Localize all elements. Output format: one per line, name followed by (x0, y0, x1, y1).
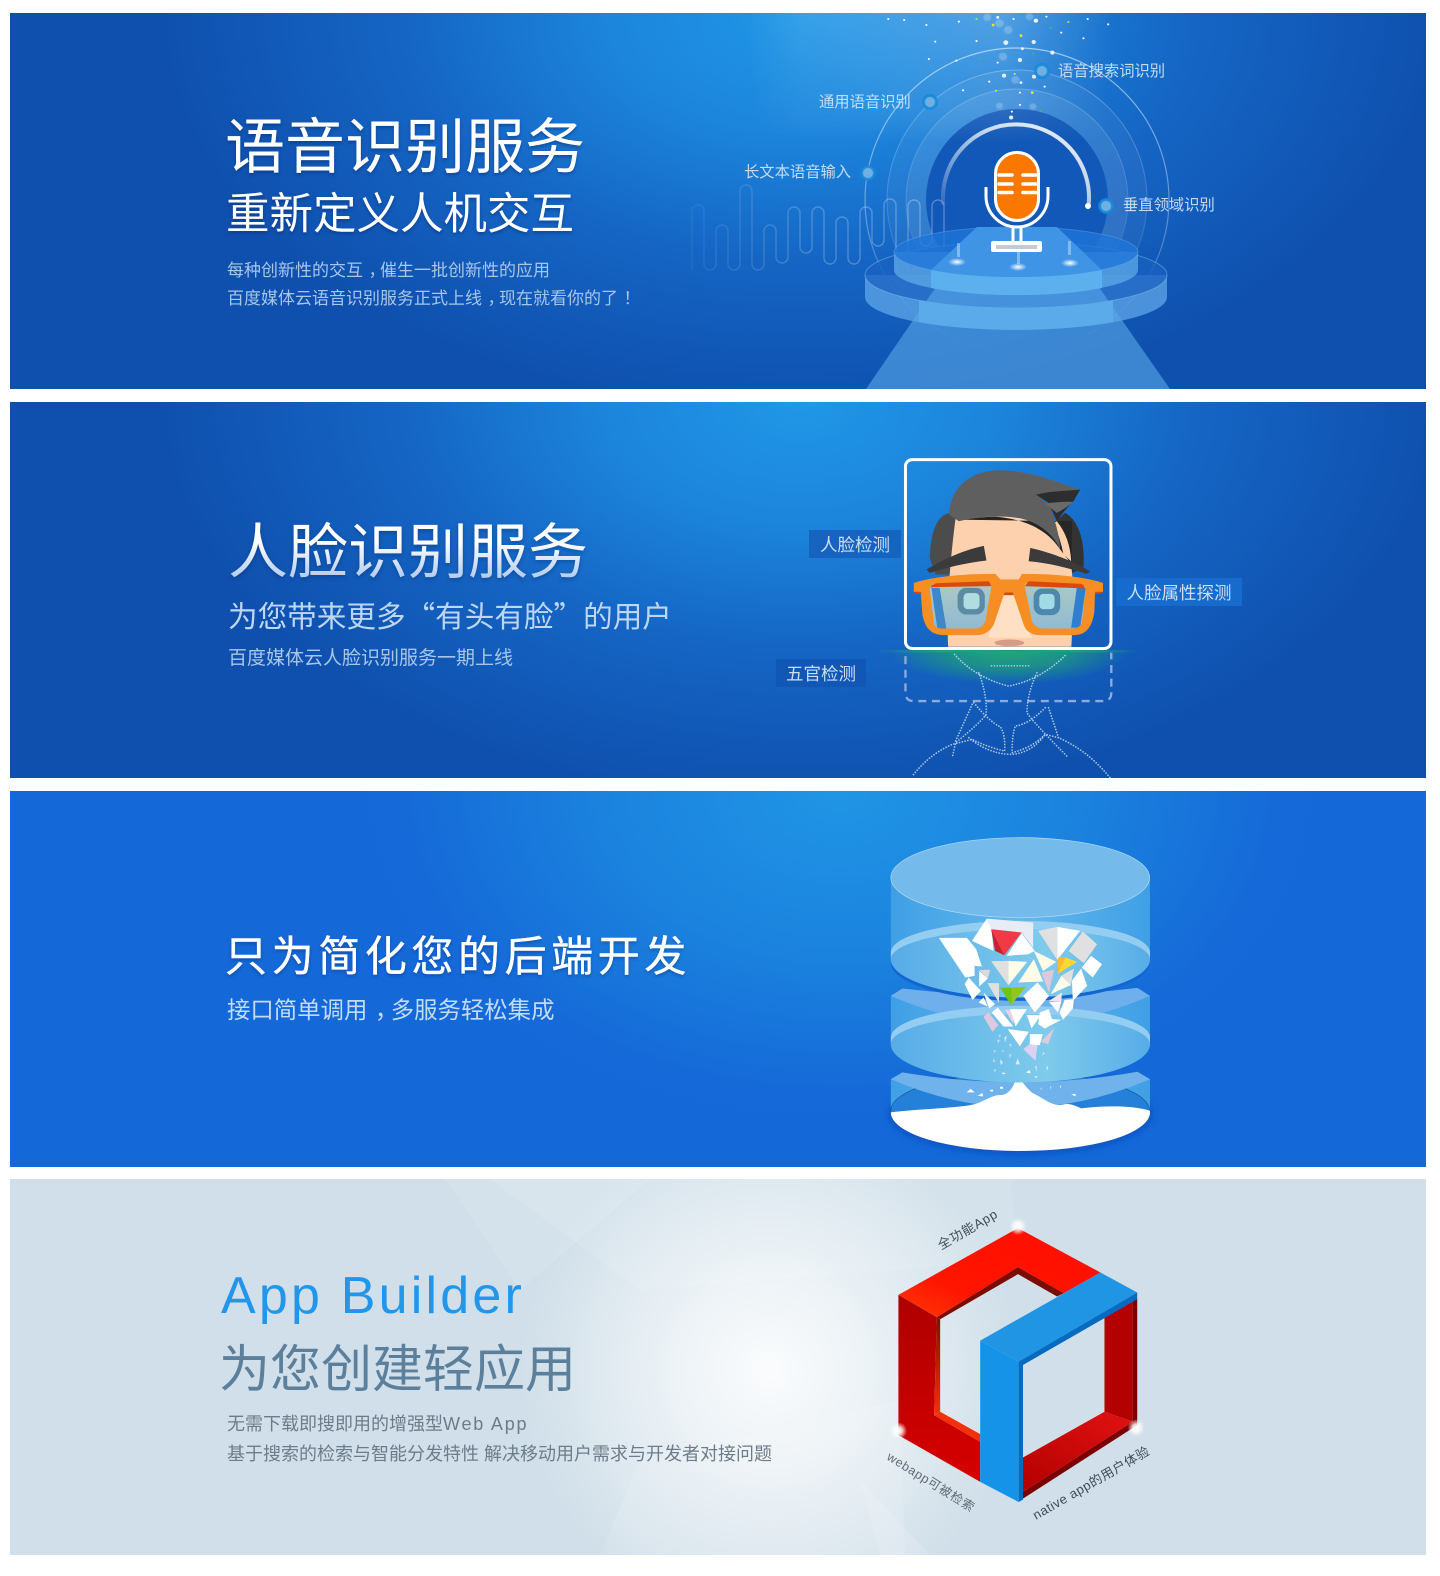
text block: App Builder description (227, 1414, 772, 1464)
text block: face service description: 百度媒体云人脸识别服务一期上线 (228, 648, 513, 669)
text block: speech service description (227, 261, 640, 308)
sound wave line (692, 185, 944, 286)
curved labels: native app的用户体验 (1030, 1443, 1152, 1523)
lower stage disc (865, 242, 1167, 330)
subheading: face recognition slogan: 为您带来更多“有头有脸”的用户 (228, 593, 672, 636)
panel: App Builder banner (10, 1179, 1426, 1555)
white scan frame (905, 460, 1111, 648)
feature labels: 通用语音识别 (819, 94, 911, 111)
icon: microphone (986, 152, 1048, 252)
falling shards (967, 1035, 1076, 1096)
curved labels: 全功能App (935, 1206, 1000, 1253)
feature labels: 语音搜索词识别 (1058, 63, 1165, 80)
white powder pile (891, 1074, 1150, 1151)
text block: speech service description: 每种创新性的交互 ，催生一批创新性的应用 (227, 261, 550, 280)
shattered fragments (939, 919, 1102, 1061)
label dots (862, 64, 1112, 212)
subheading: redefine human-computer interaction: 重新定义人机交互 (226, 191, 574, 239)
orange glasses (914, 574, 1103, 635)
text block: App Builder description: 无需下载即搜即用的增强型Web App (227, 1414, 528, 1434)
label chip: face detection (809, 530, 901, 558)
corner glints (890, 1218, 1145, 1439)
lower disc light band (919, 300, 1113, 330)
text block: speech service description: 百度媒体云语音识别服务正式上线 ，现在就看你的了 ！ (227, 289, 640, 308)
panel: face recognition banner (10, 402, 1426, 778)
illustration: microphone on stage (692, 13, 1215, 389)
cylinder middle section (891, 988, 1150, 1082)
progress arc (943, 124, 1091, 209)
panel: speech recognition banner (10, 13, 1426, 389)
cylinder bottom section (890, 1072, 1151, 1153)
light beam (768, 13, 1098, 134)
illustration: hexagonal cube logo (884, 1206, 1152, 1523)
text block: backend subtitle: 接口简单调用 ，多服务轻松集成 (227, 997, 554, 1023)
label chip: facial features: 五官检测 (786, 664, 856, 684)
upper stage disc (894, 227, 1138, 295)
feature labels: 长文本语音输入 (744, 164, 851, 181)
background facets and glow (564, 1179, 975, 1555)
dashed lower frame (905, 653, 1111, 701)
panel: backend simplification banner (10, 791, 1426, 1167)
heading: face recognition title: 人脸识别服务 (228, 519, 588, 586)
heading: speech recognition title: 语音识别服务 (225, 114, 585, 181)
label chip: facial features (776, 659, 866, 687)
illustration: cartoon face scan (883, 458, 1132, 778)
label chip: face attributes: 人脸属性探测 (1126, 583, 1232, 603)
curved labels: webapp可被检索 (884, 1448, 978, 1515)
curved labels (884, 1206, 1152, 1523)
feature labels (744, 63, 1215, 214)
dotted body outline (912, 654, 1110, 778)
label chip: face attributes (1116, 578, 1242, 606)
face portrait (914, 470, 1103, 651)
red hexagon frame (898, 1228, 1137, 1499)
text block: App Builder description: 基于搜索的检索与智能分发特性 解决移动用户需求与开发者对接问题 (227, 1444, 772, 1464)
particles (887, 13, 1109, 120)
light path trapezoid (866, 227, 1170, 389)
concentric sound rings (865, 48, 1169, 352)
stage lights (948, 241, 1079, 271)
heading: App Builder: App Builder (221, 1267, 525, 1325)
heading: backend title: 只为简化您的后端开发 (225, 933, 691, 980)
blue cube edge (980, 1272, 1137, 1502)
cylinder top section (891, 838, 1150, 1001)
label chip: face detection: 人脸检测 (820, 535, 890, 555)
subheading: build light applications: 为您创建轻应用 (219, 1341, 576, 1398)
scan glow (883, 650, 1132, 682)
feature labels: 垂直领域识别 (1123, 197, 1215, 214)
illustration: layered database cylinder (888, 837, 1152, 1156)
